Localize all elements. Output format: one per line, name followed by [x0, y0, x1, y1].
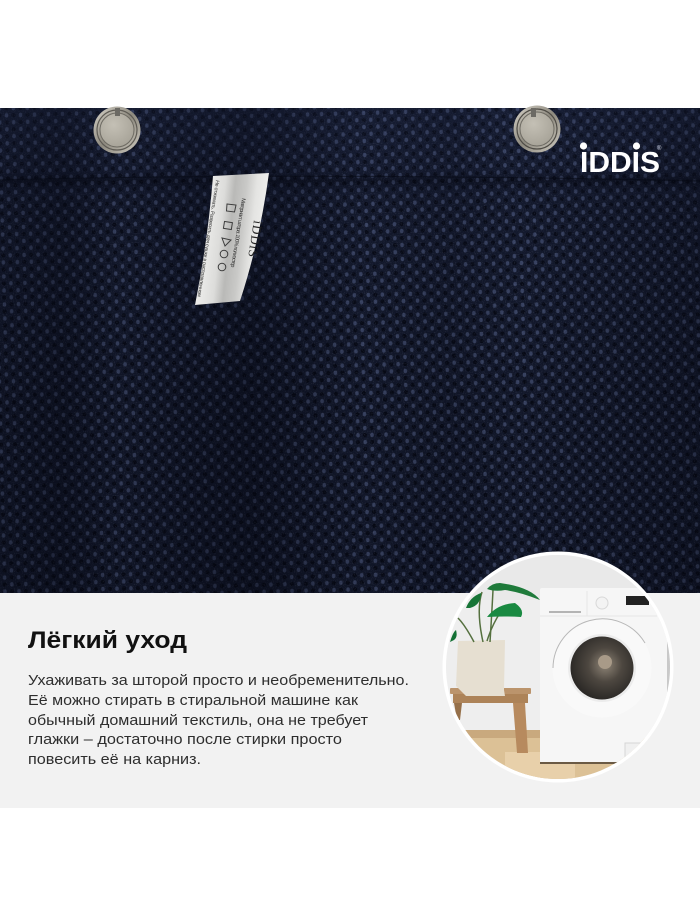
photo: navy waffle fabric curtain: [0, 106, 700, 593]
icon: right metal grommet: [514, 106, 560, 152]
circular photo: washing machine: [440, 550, 680, 788]
body text block: обычный домашний текстиль, она не требует: [28, 712, 368, 729]
body text block: Её можно стирать в стиральной машине как: [28, 692, 358, 709]
icon: monstera plant: [450, 583, 540, 642]
icon: wooden stool: [450, 688, 531, 753]
heading: Лёгкий уход: [28, 627, 187, 654]
body text block: повесить её на карниз.: [28, 751, 201, 768]
body text block: глажки – достаточно после стирки просто: [28, 731, 342, 748]
infographic canvas: [0, 106, 700, 808]
icon: canvas bag: [456, 640, 505, 696]
logo: IDDIS: IDDIS: [580, 147, 660, 179]
body text block: [28, 672, 409, 768]
icon: left metal grommet: [94, 106, 140, 154]
label care icons: [218, 204, 236, 271]
label material line: Материал: штора: 100% полиэстер: [229, 198, 246, 268]
logo: IDDIS: ®: [657, 145, 662, 152]
label care instructions line: Не отжимать. Развесить для сушки в расправленном: [195, 180, 220, 298]
label logo: iDDiS: [245, 220, 266, 258]
sewn-in care label: [195, 173, 269, 305]
panel: text panel background: [0, 593, 700, 808]
icon: washing machine: [540, 588, 675, 764]
body text block: Ухаживать за шторой просто и необременительно.: [28, 672, 409, 689]
